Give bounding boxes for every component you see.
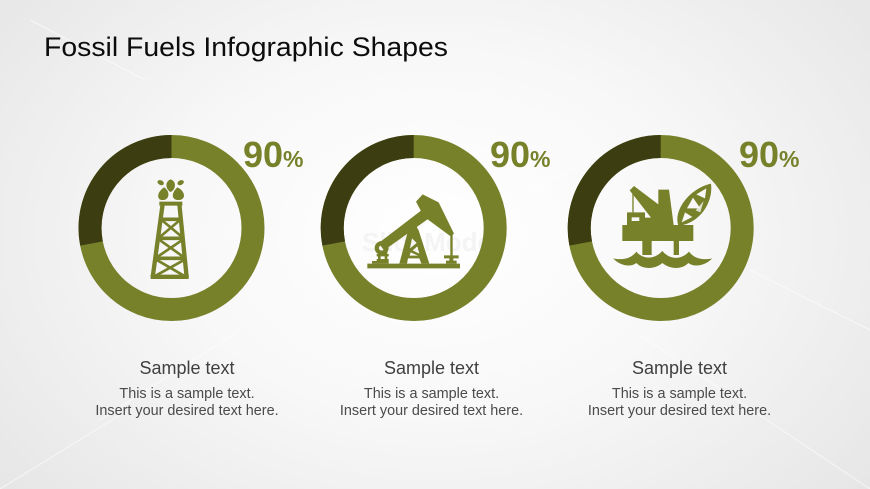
caption: derrick xyxy=(95,358,279,419)
caption: pumpjack: Insert your desired text here. xyxy=(340,403,523,419)
donut chart: pumpjack xyxy=(332,146,495,310)
donut chart: derrick xyxy=(90,146,253,310)
donut chart: offshore rig xyxy=(579,146,742,310)
percentage: offshore rig: 90% xyxy=(739,134,800,175)
title: Fossil Fuels Infographic Shapes xyxy=(44,32,448,62)
caption: offshore rig: Insert your desired text here. xyxy=(588,403,771,419)
caption: offshore rig xyxy=(588,358,771,419)
caption: pumpjack: Sample text xyxy=(384,358,479,378)
caption: derrick: Insert your desired text here. xyxy=(95,403,279,419)
caption: pumpjack xyxy=(340,358,523,419)
panel: offshore rig xyxy=(579,134,800,419)
percentage: pumpjack: 90% xyxy=(490,134,550,175)
icon: pumpjack xyxy=(367,194,460,268)
caption: derrick: Sample text xyxy=(139,358,235,378)
panel: pumpjack xyxy=(332,134,550,419)
caption: pumpjack: This is a sample text. xyxy=(364,386,499,402)
percentage: derrick: 90% xyxy=(243,134,304,175)
panel: oil derrick xyxy=(90,134,304,419)
caption: offshore rig: Sample text xyxy=(632,358,727,378)
icon: offshore rig xyxy=(613,184,712,268)
icon: oil derrick xyxy=(151,179,189,279)
caption: offshore rig: This is a sample text. xyxy=(612,386,747,402)
caption: derrick: This is a sample text. xyxy=(119,386,255,402)
watermark: SlideModel xyxy=(362,227,499,257)
